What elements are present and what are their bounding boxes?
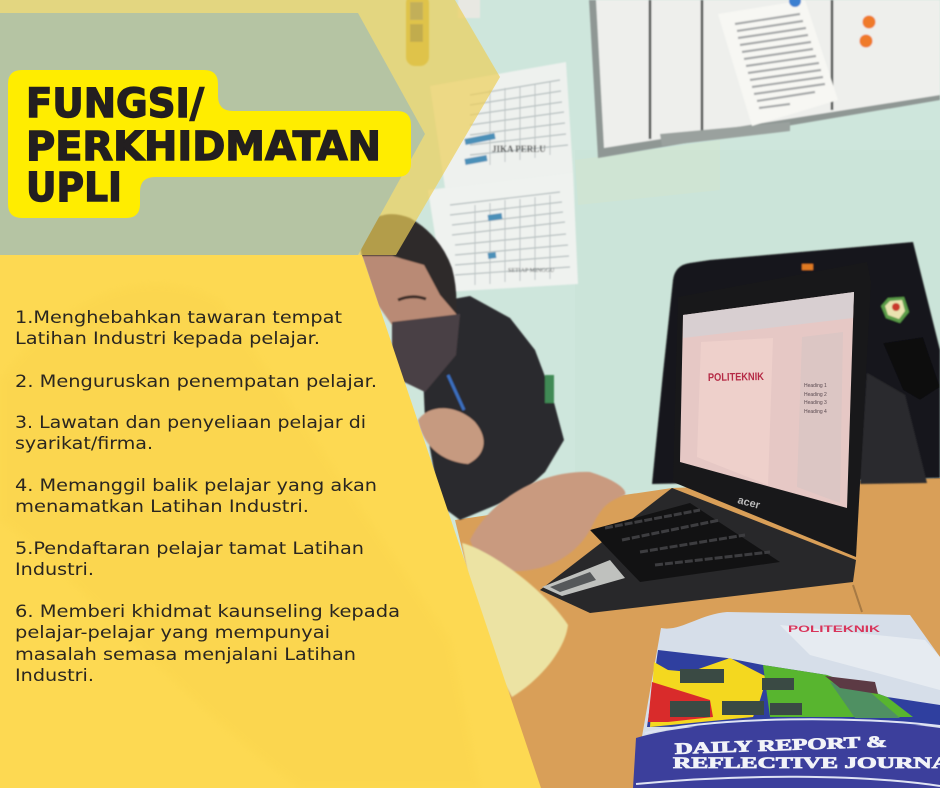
screen text: POLITEKNIK xyxy=(708,371,764,384)
laptop: acer xyxy=(736,494,762,512)
title text xyxy=(26,81,381,211)
item 6: pelajar-pelajar yang mempunyai xyxy=(15,623,330,643)
item 1: 1.Menghebahkan tawaran tempat xyxy=(15,308,342,328)
book title: DAILY REPORT & xyxy=(675,734,887,758)
hand and sleeve xyxy=(462,472,625,697)
item 5: 5.Pendaftaran pelajar tamat Latihan xyxy=(15,539,364,559)
laptop: Heading 1 xyxy=(804,383,827,389)
item 1 xyxy=(15,308,342,349)
item 1: Latihan Industri kepada pelajar. xyxy=(15,329,320,349)
title text: UPLI xyxy=(26,165,122,211)
item 6: masalah semasa menjalani Latihan xyxy=(15,645,356,665)
table xyxy=(455,478,940,788)
title block xyxy=(8,70,411,218)
posters on wall xyxy=(428,62,578,292)
item 3: 3. Lawatan dan penyeliaan pelajar di xyxy=(15,413,366,433)
book title: REFLECTIVE JOURNAL xyxy=(673,755,940,772)
laptop: Heading 3 xyxy=(804,400,827,406)
laptop: Heading 2 xyxy=(804,392,827,398)
item 5: Industri. xyxy=(15,560,94,580)
item 4: 4. Memanggil balik pelajar yang akan xyxy=(15,476,377,496)
posters on wall: JIKA PERLU xyxy=(492,144,546,154)
vest badge xyxy=(881,297,909,323)
item 3: syarikat/firma. xyxy=(15,434,153,454)
item 6: Industri. xyxy=(15,666,94,686)
yellow text panel xyxy=(0,255,541,788)
item 2: 2. Menguruskan penempatan pelajar. xyxy=(15,372,377,392)
title text: FUNGSI/ xyxy=(26,81,204,127)
sage green arrow banner xyxy=(0,13,425,255)
item 6 xyxy=(15,602,400,686)
item 4: menamatkan Latihan Industri. xyxy=(15,497,309,517)
laptop: Heading 4 xyxy=(804,409,827,415)
whiteboard xyxy=(589,0,940,158)
item 3 xyxy=(15,413,366,454)
item 6: 6. Memberi khidmat kaunseling kepada xyxy=(15,602,400,622)
title text: PERKHIDMATAN xyxy=(26,124,381,170)
title highlight xyxy=(8,70,411,218)
book on the table xyxy=(633,612,940,788)
black chair and vest xyxy=(652,242,940,484)
book on the table: POLITEKNIK xyxy=(788,624,881,634)
item 4 xyxy=(15,476,377,517)
laptop xyxy=(540,262,871,613)
book title xyxy=(673,734,940,772)
wall remote xyxy=(406,0,480,66)
item 5 xyxy=(15,539,364,580)
person xyxy=(358,214,564,520)
translucent yellow chevron xyxy=(0,0,500,255)
list of functions xyxy=(15,308,400,686)
posters on wall: SETIAP MINGGU xyxy=(508,268,555,274)
